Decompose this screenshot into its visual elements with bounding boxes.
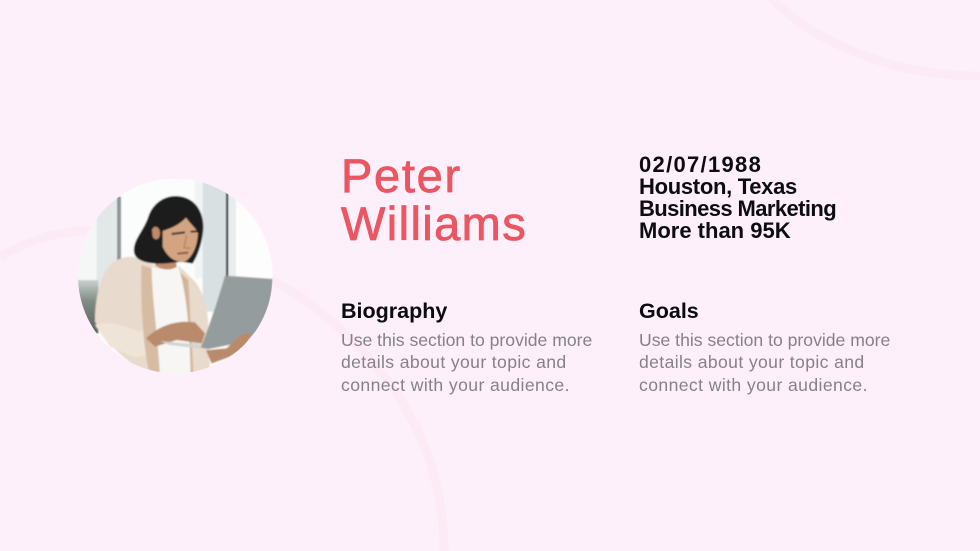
laptop lid xyxy=(201,276,273,349)
goals text xyxy=(639,330,890,395)
profile facts xyxy=(639,152,836,243)
biography text: details about your topic and xyxy=(341,352,567,372)
profile facts: Houston, Texas xyxy=(639,174,797,199)
profile facts: More than 95K xyxy=(639,218,791,243)
profile facts: 02/07/1988 xyxy=(639,152,762,177)
name title: Peter xyxy=(341,149,462,202)
biography section xyxy=(341,299,592,395)
neck xyxy=(154,261,178,270)
hair xyxy=(134,196,203,264)
goals heading: Goals xyxy=(639,299,699,323)
biography text: connect with your audience. xyxy=(341,375,570,395)
shirt xyxy=(95,257,210,375)
biography heading: Biography xyxy=(341,299,447,323)
profile facts: Business Marketing xyxy=(639,196,836,221)
t-shirt xyxy=(152,267,191,375)
goals text: connect with your audience. xyxy=(639,375,868,395)
name title: Williams xyxy=(341,197,527,250)
arm xyxy=(146,322,205,347)
laptop base xyxy=(160,341,201,348)
goals section xyxy=(639,299,890,395)
face xyxy=(163,218,198,262)
biography text xyxy=(341,330,592,395)
goals text: details about your topic and xyxy=(639,352,865,372)
name title xyxy=(340,149,527,250)
goals text: Use this section to provide more xyxy=(639,330,890,350)
hand xyxy=(206,333,252,363)
portrait photo xyxy=(78,178,272,372)
biography text: Use this section to provide more xyxy=(341,330,592,350)
